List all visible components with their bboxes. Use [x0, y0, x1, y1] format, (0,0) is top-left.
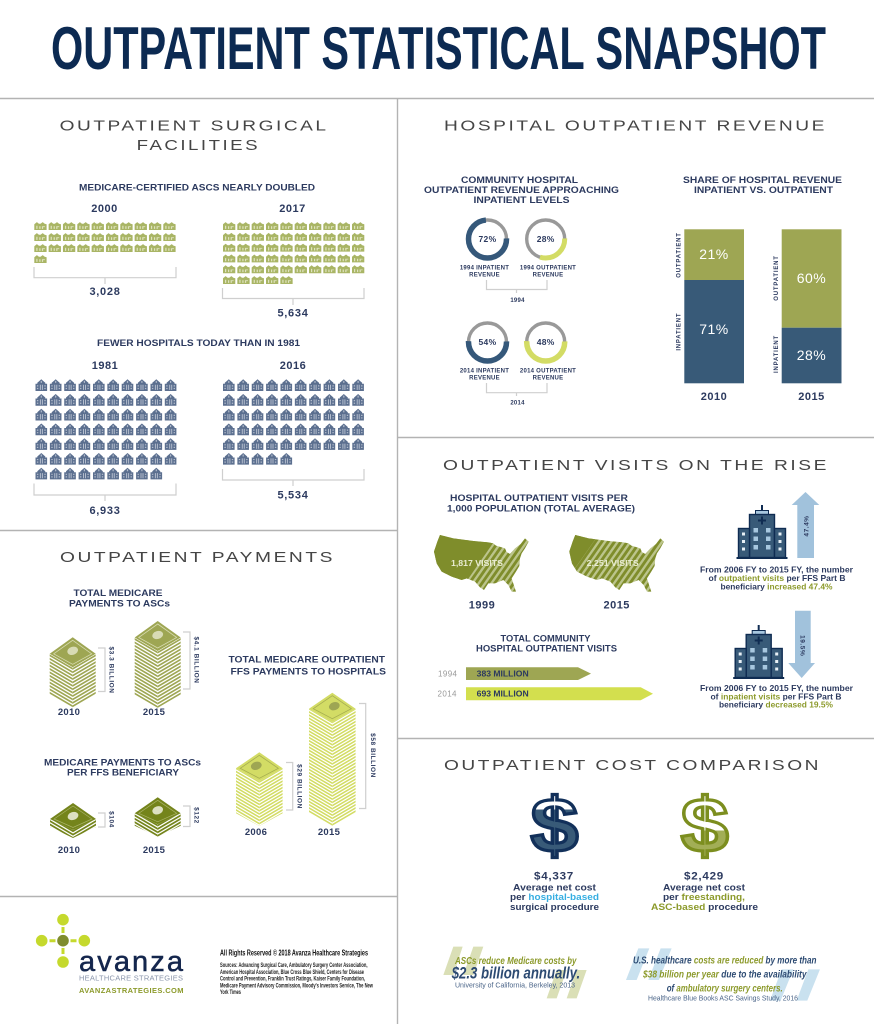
text: hospital-based cost: surgical procedure	[510, 902, 599, 913]
map: 2015	[569, 535, 664, 592]
arrow bar: 2014	[438, 687, 653, 700]
quote: healthcare savings: of ambulatory surgery centers.	[667, 983, 783, 995]
label: 2010: 2010	[58, 845, 80, 856]
quote: Medicare savings: ASCs reduce Medicare costs by	[454, 955, 577, 967]
label: 2015: 2015	[143, 845, 166, 856]
heading: cost comparison: OUTPATIENT COST COMPARISON	[444, 757, 821, 774]
arrow: up 47.4%: 47.4%	[804, 515, 810, 537]
subheading: visits per 1,000: HOSPITAL OUTPATIENT VISITS PER	[450, 493, 628, 503]
icon grid: ASCs 2000	[34, 222, 176, 263]
value: $104: $104	[108, 811, 114, 828]
text: outpatient increase	[700, 564, 854, 592]
text: ASC-based cost: Average net cost	[663, 883, 746, 894]
sources	[220, 962, 373, 996]
stacked bar: 2015: INPATIENT	[774, 335, 780, 373]
subheading: FFS payments to hospitals	[228, 655, 386, 676]
text: outpatient increase: From 2006 FY to 2015 FY, the number	[700, 564, 854, 574]
stacked bar: 2010: 71%	[699, 321, 729, 337]
labels: 2014: REVENUE	[469, 376, 500, 382]
label: 2014: 2014	[510, 400, 525, 406]
stacked bar: 2010: 21%	[699, 246, 729, 262]
bracket: 1981	[34, 484, 176, 501]
text: hospital-based cost: $4,337	[534, 870, 574, 882]
quote: Medicare savings: University of California, Berkeley, 2013	[455, 980, 575, 989]
label: 2000: 2000	[91, 203, 118, 215]
bracket: 2017	[222, 288, 364, 305]
subheading: share of revenue: INPATIENT VS. OUTPATIENT	[694, 185, 833, 195]
bracket: $58 billion	[359, 704, 366, 808]
bracket: 2000	[34, 267, 176, 284]
stacked bar: 2015: 28%	[797, 347, 826, 363]
labels: 1994	[460, 266, 576, 278]
panel: footer	[36, 914, 373, 996]
money stack: 2015 ASC	[135, 621, 181, 708]
labels: 1994: 1994 OUTPATIENT	[520, 266, 576, 272]
arrow bar: 2014: 2014	[438, 690, 457, 699]
subheading: visits per 1,000	[447, 493, 635, 514]
text: ASC-based cost: per freestanding,	[663, 892, 745, 903]
stacked bar: 2010: OUTPATIENT	[676, 232, 682, 278]
text: hospital-based cost	[510, 870, 599, 913]
text: outpatient increase: of outpatient visits per FFS Part B	[708, 573, 846, 583]
arrow: up 47.4%	[792, 492, 819, 558]
value: 5,634: 5,634	[277, 308, 309, 320]
text: inpatient decrease: beneficiary decreased 19.5%	[719, 700, 833, 710]
sources: York Times	[220, 989, 241, 996]
subheading: hospitals: FEWER HOSPITALS TODAY THAN IN 1981	[97, 338, 300, 348]
panel: outpatient cost comparison	[443, 757, 821, 1003]
labels: 2014: REVENUE	[533, 376, 563, 382]
money stack: 2006 hospitals	[236, 752, 283, 826]
label: 2015: 2015	[318, 827, 341, 838]
copyright: All Rights Reserved © 2018 Avanza Healthcare Strategies	[220, 949, 368, 958]
heading: revenue: HOSPITAL OUTPATIENT REVENUE	[444, 118, 827, 135]
quote: Medicare savings: $2.3 billion annually.	[451, 963, 580, 982]
sources: Sources: Advancing Surgical Care, Ambulatory Surgery Center Association,	[220, 962, 368, 969]
value: $3.3 billion: $3.3 BILLION	[108, 646, 114, 694]
sources: Medicare Payment Advisory Commission, Moody's Investors Service, The New	[220, 982, 373, 989]
stacked bar: 2015: OUTPATIENT	[774, 255, 780, 301]
donut: 48%: 48%	[537, 337, 555, 347]
arrow bar: 1994: 383 MILLION	[477, 670, 529, 679]
panel: outpatient visits	[410, 457, 854, 710]
stacked bar: 2010	[676, 229, 744, 383]
subheading: total medicare payments to ASCs	[69, 588, 170, 608]
heading: surgical facilities	[60, 118, 329, 154]
text: ASC-based cost: $2,429	[684, 870, 724, 882]
logo: avanza	[36, 914, 184, 995]
value: 5,534: 5,534	[277, 490, 309, 502]
donut: 28%	[527, 220, 565, 258]
bracket: $4.1 billion	[183, 632, 190, 689]
bracket: 1994	[486, 280, 547, 293]
value: $29 billion: $29 BILLION	[296, 764, 302, 809]
icon grid: hospitals 1981	[36, 379, 176, 479]
arrow: down 19.5%	[788, 611, 815, 678]
text: inpatient decrease	[700, 683, 854, 710]
map: 1999: 1,817 VISITS	[451, 559, 504, 568]
label: 2010: 2010	[701, 391, 727, 403]
bracket: 2014	[486, 383, 547, 396]
subheading: total community visits	[476, 634, 617, 654]
text: inpatient decrease: From 2006 FY to 2015 FY, the number	[700, 683, 854, 693]
icon: navy dollar sign: $	[531, 783, 578, 869]
heading: outpatient payments: OUTPATIENT PAYMENTS	[60, 549, 335, 566]
stacked bar: 2015	[774, 229, 842, 383]
bracket: $122	[183, 806, 190, 826]
stacked bar: 2015: 60%	[797, 270, 826, 286]
label: 2015: 2015	[603, 600, 630, 612]
subheading: payments per beneficiary	[44, 758, 201, 778]
icon: olive dollar sign: $	[681, 783, 729, 869]
value: $4.1 billion: $4.1 BILLION	[192, 636, 200, 684]
subheading: payments per beneficiary: PER FFS BENEFICIARY	[67, 768, 180, 778]
quote: Medicare savings	[443, 947, 587, 998]
logo: avanza: HEALTHCARE STRATEGIES	[79, 974, 183, 983]
arrow bar: 2014: 693 MILLION	[477, 690, 529, 699]
subheading: total community visits: TOTAL COMMUNITY	[500, 634, 591, 644]
value: 3,028: 3,028	[89, 286, 121, 298]
icon grid: ASCs 2017	[223, 222, 364, 284]
subheading: community hospital revenue	[424, 175, 619, 205]
donut: 48%	[527, 323, 565, 361]
donut: 72%: 72%	[479, 234, 497, 244]
label: 1994: 1994	[510, 298, 525, 304]
label: 2017: 2017	[279, 203, 306, 215]
heading: surgical facilities: FACILITIES	[137, 137, 260, 154]
quote: healthcare savings: U.S. healthcare costs are reduced by more than	[633, 954, 816, 966]
subheading: total medicare payments to ASCs: TOTAL MEDICARE	[74, 588, 162, 598]
arrow: down 19.5%: 19.5%	[798, 635, 806, 656]
quote: healthcare savings: Healthcare Blue Books ASC Savings Study, 2016	[648, 994, 798, 1003]
subheading: total medicare payments to ASCs: PAYMENTS TO ASCs	[69, 598, 170, 608]
subheading: community hospital revenue: COMMUNITY HOSPITAL	[461, 175, 578, 185]
panel: outpatient payments	[44, 549, 386, 856]
label: 2015: 2015	[798, 391, 825, 403]
donut: 54%	[468, 323, 506, 361]
quote: healthcare savings: $38 billion per year due to the availability	[642, 969, 807, 981]
value: 6,933: 6,933	[89, 505, 121, 517]
subheading: total community visits: HOSPITAL OUTPATIENT VISITS	[476, 644, 617, 654]
subheading: community hospital revenue: OUTPATIENT REVENUE APPROACHING	[424, 185, 619, 195]
label: 2015: 2015	[143, 707, 166, 718]
value: $58 billion: $58 BILLION	[369, 733, 376, 778]
arrow bar: 1994	[438, 667, 591, 680]
subheading: FFS payments to hospitals: FFS PAYMENTS TO HOSPITALS	[230, 666, 386, 676]
text: hospital-based cost: Average net cost	[513, 883, 597, 894]
logo: avanza: avanza	[79, 946, 184, 978]
labels: 1994: 1994 INPATIENT	[460, 266, 509, 272]
text: ASC-based cost	[651, 870, 758, 913]
donut: 72%	[468, 220, 506, 258]
bracket: $104	[98, 813, 105, 827]
label: 2006: 2006	[245, 827, 267, 838]
heading: visits: OUTPATIENT VISITS ON THE RISE	[443, 457, 829, 474]
text: inpatient decrease: of inpatient visits per FFS Part B	[710, 691, 842, 701]
labels: 2014: 2014 OUTPATIENT	[520, 368, 576, 374]
text: hospital-based cost: per hospital-based	[510, 892, 599, 903]
bracket: 2016	[222, 469, 364, 486]
subheading: ASCs: MEDICARE-CERTIFIED ASCS NEARLY DOUBLED	[79, 182, 315, 192]
map: 2015: 2,251 VISITS	[587, 559, 639, 568]
money stack: 2010 ASC	[50, 637, 96, 708]
subheading: visits per 1,000: 1,000 POPULATION (TOTAL AVERAGE)	[447, 504, 635, 514]
value: $122: $122	[192, 807, 200, 824]
bracket: $3.3 billion	[98, 648, 105, 692]
icon: hospital building (outpatient)	[736, 505, 788, 559]
money stack: 2015 hospitals	[309, 693, 356, 826]
logo: avanza: AVANZASTRATEGIES.COM	[79, 986, 184, 995]
sources: American Hospital Association, Blue Cross Blue Shield, Centers for Disease	[220, 969, 364, 976]
icon: hospital building (inpatient)	[733, 625, 784, 679]
money stack: $104	[50, 803, 96, 838]
donut: 54%: 54%	[479, 337, 497, 347]
subheading: share of revenue: SHARE OF HOSPITAL REVENUE	[683, 175, 842, 185]
label: 1981: 1981	[92, 360, 118, 372]
sources: Control and Prevention, Franklin Trust Ratings, Kaiser Family Foundation,	[220, 976, 365, 983]
label: 2016: 2016	[280, 360, 306, 372]
icon grid: hospitals 2016	[223, 379, 364, 465]
label: 1999: 1999	[469, 600, 495, 612]
money stack: $122	[135, 797, 181, 837]
labels: 1994: REVENUE	[533, 272, 563, 278]
labels: 2014	[460, 368, 576, 382]
subheading: community hospital revenue: INPATIENT LEVELS	[474, 195, 570, 205]
labels: 1994: REVENUE	[469, 272, 500, 278]
quote: healthcare savings	[626, 948, 820, 1003]
text: outpatient increase: beneficiary increased 47.4%	[720, 582, 833, 592]
arrow bar: 1994: 1994	[438, 670, 458, 679]
panel: hospital outpatient revenue	[424, 118, 842, 406]
text: ASC-based cost: ASC-based procedure	[651, 902, 758, 913]
bracket: $29 billion	[286, 762, 293, 810]
stacked bar: 2010: INPATIENT	[676, 313, 682, 351]
map: 1999	[434, 535, 529, 592]
subheading: FFS payments to hospitals: TOTAL MEDICARE OUTPATIENT	[228, 655, 385, 665]
panel: outpatient surgical facilities	[34, 118, 364, 517]
subheading: payments per beneficiary: MEDICARE PAYMENTS TO ASCs	[44, 758, 201, 768]
subheading: share of revenue	[683, 175, 842, 195]
label: 2010: 2010	[58, 707, 80, 718]
heading: surgical facilities: OUTPATIENT SURGICAL	[60, 118, 329, 135]
labels: 2014: 2014 INPATIENT	[460, 368, 509, 374]
donut: 28%: 28%	[537, 234, 555, 244]
